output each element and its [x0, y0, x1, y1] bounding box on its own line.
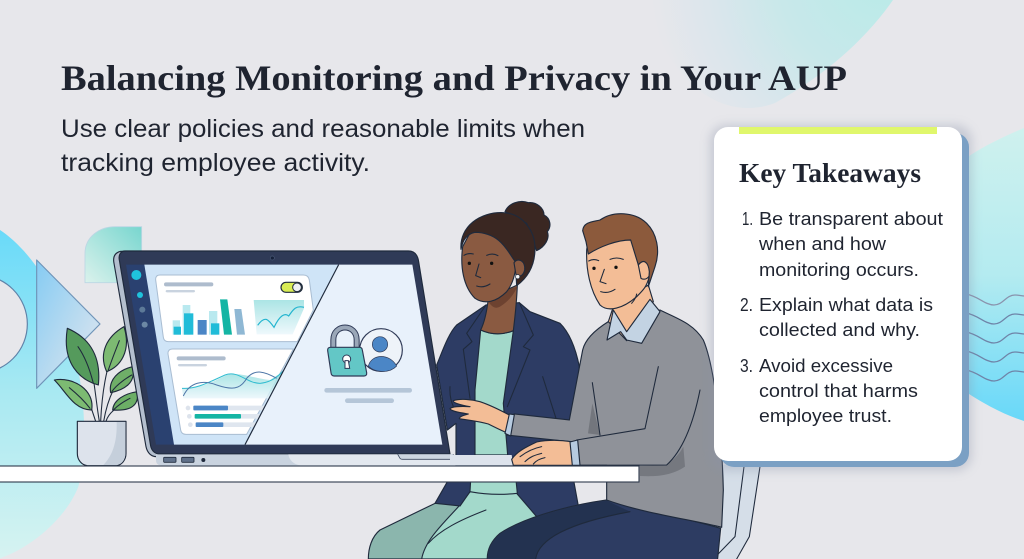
woman near leg: [422, 492, 537, 559]
subtitle: tracking employee activity.: [61, 149, 370, 177]
padlock icon: [328, 327, 367, 376]
woman jacket: [435, 303, 579, 517]
right wave lines: [966, 294, 1024, 381]
wave chart: [182, 372, 283, 398]
man neck: [608, 285, 653, 341]
lime accent bar: [739, 127, 937, 134]
laptop base: [156, 454, 453, 465]
dashboard background: [144, 265, 339, 445]
top dashboard card: [156, 275, 313, 342]
card heading: Key Takeaways: [739, 158, 921, 188]
subtitle: [61, 115, 585, 177]
woman far leg: [368, 503, 470, 559]
takeaways card: [710, 125, 972, 471]
laptop bezel: [119, 251, 450, 454]
card offset edge: [720, 133, 969, 467]
man sweater: [506, 310, 723, 527]
woman face: [462, 227, 517, 302]
privacy panel: [245, 265, 442, 445]
woman: [368, 201, 579, 559]
title: Balancing Monitoring and Privacy in Your AUP: [61, 58, 847, 98]
woman hair bun: [505, 201, 550, 251]
user avatar icon: [360, 329, 402, 371]
left gradient blob: [0, 230, 84, 558]
takeaway 3: 3.: [740, 355, 753, 376]
man: [450, 214, 723, 559]
woman facial features: [464, 254, 498, 287]
man collar: [607, 299, 660, 343]
desk: [0, 466, 639, 482]
text placeholder lines: [324, 388, 412, 403]
desk surface: [450, 455, 513, 465]
man far cuff: [505, 414, 514, 436]
man far hand: [450, 399, 509, 433]
man near cuff: [570, 440, 580, 465]
screen sidebar: [126, 265, 175, 445]
takeaway 1: Be transparent about: [759, 208, 943, 229]
left decorative shapes: [0, 227, 142, 558]
man hair: [583, 214, 658, 287]
triangle: [37, 260, 100, 388]
takeaway 2: 2.: [740, 294, 753, 315]
card body: [714, 127, 962, 461]
takeaway 1: monitoring occurs.: [759, 259, 919, 280]
laptop: [114, 251, 453, 465]
takeaway 1: when and how: [758, 233, 887, 254]
man ear: [638, 260, 652, 279]
takeaway 3: control that harms: [759, 380, 918, 401]
progress bars: [186, 406, 266, 427]
chair: [710, 465, 760, 559]
takeaway 3: Avoid excessive: [759, 355, 893, 376]
man trousers: [487, 500, 721, 559]
lower dashboard card: [168, 349, 293, 434]
card soft shadow: [710, 125, 972, 471]
sweater fold lines: [577, 367, 700, 465]
line chart: [254, 300, 304, 334]
top right soft shape: [645, 0, 893, 108]
plant stems: [91, 370, 114, 421]
leaves: [54, 327, 138, 410]
takeaway 2: collected and why.: [759, 319, 920, 340]
takeaway 1: [742, 208, 943, 280]
rounded teal square: [85, 227, 142, 283]
right gradient blob: [960, 128, 1024, 421]
webcam: [270, 256, 274, 260]
woman ear and earring: [514, 260, 525, 276]
woman neck: [481, 285, 517, 334]
man near hand: [512, 440, 573, 465]
potted plant: [54, 327, 138, 466]
takeaway 2: Explain what data is: [759, 294, 933, 315]
woman top: [475, 330, 513, 455]
man facial features: [589, 258, 637, 303]
toggle switch: [281, 282, 302, 292]
woman hair: [461, 213, 535, 286]
takeaway 3: employee trust.: [759, 405, 892, 426]
laptop rear edge: [114, 251, 200, 457]
outlined circle: [0, 275, 27, 373]
takeaway 3: [740, 355, 918, 426]
man face: [587, 227, 649, 309]
jacket lapels: [450, 303, 556, 418]
subtitle: Use clear policies and reasonable limits when: [61, 115, 585, 143]
takeaway 2: [740, 294, 933, 340]
takeaway 1: 1.: [742, 208, 753, 229]
bar chart: [173, 299, 245, 335]
plant pot: [77, 421, 126, 466]
sweater shadows: [588, 403, 600, 435]
